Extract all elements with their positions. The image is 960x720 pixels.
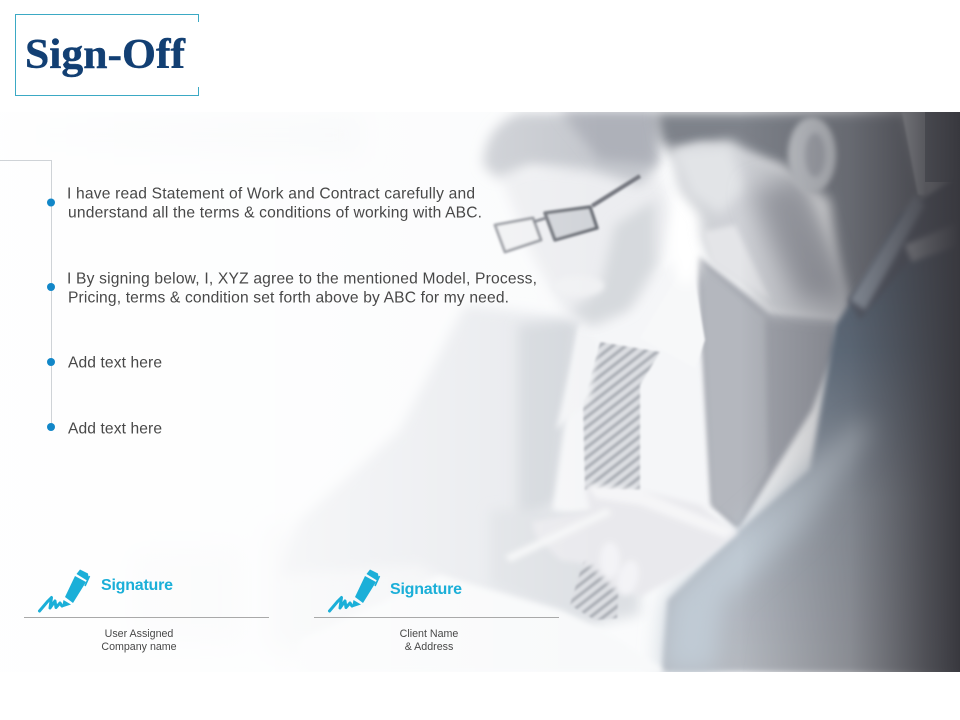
lower torso — [544, 511, 644, 626]
text block: agreement: Pricing, terms & condition set forth above by ABC for my need. — [68, 290, 509, 306]
right man jacket — [660, 252, 948, 672]
title frame — [16, 14, 198, 96]
left soft background blocks — [20, 115, 450, 650]
background photo: two businessmen reviewing a document — [286, 112, 960, 672]
left man jacket, right side — [697, 255, 835, 530]
text block: agreement — [67, 270, 537, 306]
caption: Client Name — [400, 628, 458, 640]
panel: client signature — [314, 570, 559, 653]
bright gap between heads — [679, 254, 706, 281]
signature heading: Signature — [390, 581, 462, 598]
right dark fade — [740, 112, 960, 672]
text block: statement of work — [67, 186, 482, 222]
shirt collar — [696, 290, 706, 354]
signature heading: Signature — [101, 577, 173, 594]
left man jacket, left side — [322, 307, 561, 589]
text block: statement of work: I have read Statement of Work and Contract carefully and — [67, 186, 475, 202]
icon: pen signing — [330, 570, 380, 611]
bullet 1 — [47, 198, 55, 206]
text block: add text 1: Add text here — [68, 354, 162, 372]
caption: & Address — [405, 641, 453, 653]
glasses — [495, 176, 640, 252]
title text: Sign-Off — [25, 32, 186, 78]
signature line — [24, 617, 269, 618]
ear — [788, 117, 836, 193]
bullet 4 — [47, 423, 55, 431]
right man hair — [655, 112, 925, 320]
hands and pen — [505, 484, 738, 598]
left man face and neck — [508, 171, 668, 310]
timeline bracket — [0, 160, 52, 430]
text block: add text 2: Add text here — [68, 420, 162, 438]
left white fade — [23, 118, 568, 634]
panel: user signature — [24, 570, 269, 653]
sleeve highlight — [662, 420, 875, 672]
window at top right — [903, 114, 922, 194]
right man face — [672, 140, 850, 322]
tie — [583, 342, 660, 490]
bullet 2 — [47, 283, 55, 291]
icon: pen signing — [40, 570, 90, 611]
caption: User Assigned — [105, 628, 173, 640]
signature line — [314, 617, 559, 618]
bullet 3 — [47, 358, 55, 366]
text block: agreement: I By signing below, I, XYZ agree to the mentioned Model, Process, — [67, 270, 537, 288]
papers on the table — [448, 580, 663, 671]
panel: terms list timeline — [0, 160, 537, 438]
text block: statement of work: understand all the terms & conditions of working with ABC. — [68, 204, 482, 222]
caption: Company name — [101, 641, 177, 653]
title — [16, 14, 198, 96]
left man hair — [483, 113, 660, 185]
left man shirt — [554, 421, 570, 509]
